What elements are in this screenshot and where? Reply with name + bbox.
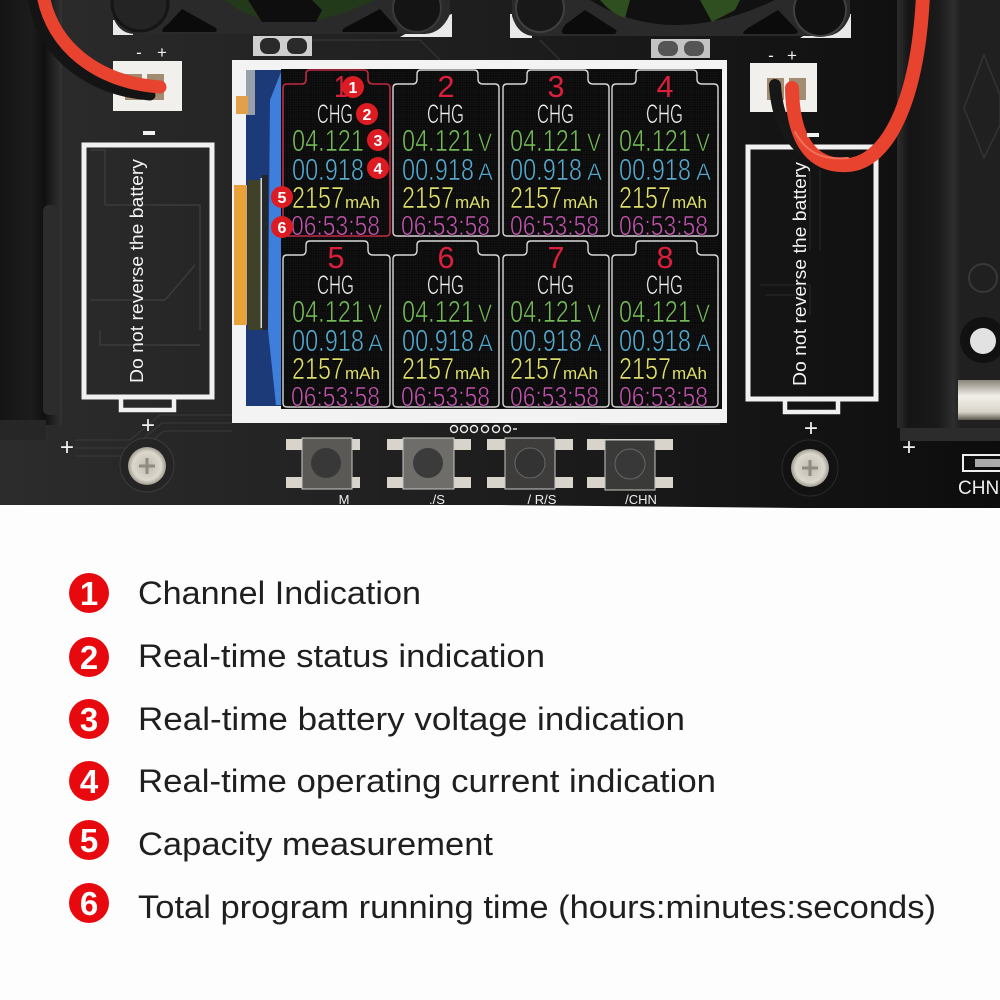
screen callout badges (271, 76, 389, 238)
channel LED label: CHN (958, 478, 999, 499)
polarity marks: + (60, 434, 74, 461)
badge 5 (271, 186, 293, 208)
polarity marks: + (787, 46, 797, 65)
legend item 1: 1 (80, 575, 98, 612)
channel 8 cell: 8 (656, 240, 674, 275)
channel 3 cell: 3 (548, 69, 564, 104)
channel 6 cell: 04.121 (402, 294, 474, 329)
channel 4 cell: CHG (646, 99, 683, 129)
channel 7 cell (503, 240, 609, 412)
cooling fan right (510, 0, 851, 38)
channel 5 cell: 06:53:58 (291, 381, 380, 412)
badge 4 (367, 157, 389, 179)
channel 7 cell: CHG (537, 270, 574, 300)
right power connector (750, 63, 817, 112)
legend item 4: 4 (80, 763, 99, 800)
channel 7 cell: mAh (563, 364, 598, 383)
channel 6 cell: 2157 (402, 351, 454, 386)
legend item 2: 2 (80, 639, 98, 676)
channel 1 cell: 00.918 (292, 152, 364, 187)
channel 4 cell: A (696, 159, 711, 186)
badge 2: 2 (363, 107, 372, 124)
button labels (339, 492, 657, 507)
channel 6 cell: 06:53:58 (401, 381, 490, 412)
display module (232, 60, 727, 423)
battery warning left: Do not reverse the battery (127, 159, 147, 383)
legend item 2: Real-time status indication (138, 638, 545, 674)
channel 4 cell (612, 69, 718, 241)
channel 1 cell: 2157 (292, 180, 344, 215)
legend item 5: Capacity measurement (138, 826, 493, 862)
channel 5 cell (283, 240, 390, 412)
channel 6 cell: CHG (427, 270, 464, 300)
channel 7 cell: A (587, 330, 602, 357)
channel 5 cell: CHG (317, 270, 354, 300)
channel 5 cell: V (368, 300, 382, 328)
badge 2 (356, 103, 378, 125)
mounting screw right (782, 440, 838, 496)
channel 1 cell: 04.121 (292, 123, 364, 158)
badge 6: 6 (278, 220, 287, 237)
legend item 1 (69, 573, 421, 613)
channel 5 cell: 2157 (292, 351, 344, 386)
legend item 4: Real-time operating current indication (138, 763, 716, 799)
channel 8 cell: CHG (646, 270, 683, 300)
channel 6 cell: mAh (455, 364, 490, 383)
channel 3 cell: A (587, 159, 602, 186)
channel 2 cell: A (478, 159, 493, 186)
badge 1: 1 (349, 80, 358, 97)
channel 7 cell: 00.918 (510, 323, 582, 358)
legend (69, 573, 936, 925)
battery warning right: Do not reverse the battery (790, 162, 810, 386)
channel 8 cell: 04.121 (619, 294, 691, 329)
channel 3 cell: CHG (537, 99, 574, 129)
button 2 (387, 438, 471, 489)
channel 7 cell: V (587, 300, 601, 328)
badge 6 (271, 216, 293, 238)
badge 3: 3 (374, 133, 383, 150)
left power connector (113, 61, 182, 111)
channel 3 cell: V (587, 129, 601, 157)
channel 7 cell: 04.121 (510, 294, 582, 329)
channel 6 cell: 6 (438, 240, 454, 275)
battery outline left (84, 145, 212, 410)
channel 6 cell: V (478, 300, 492, 328)
channel 2 cell: mAh (455, 193, 490, 212)
channel 7 cell: 06:53:58 (510, 381, 599, 412)
channel 7 cell: 7 (548, 240, 564, 275)
channel 3 cell: mAh (563, 193, 598, 212)
fan solder pads (253, 36, 710, 58)
right battery holder (897, 0, 1000, 441)
channel 1 cell: mAh (345, 193, 380, 212)
channel 8 cell: 2157 (619, 351, 671, 386)
channel 6 cell: 00.918 (402, 323, 474, 358)
legend item 6: Total program running time (hours:minutes:seconds) (138, 889, 936, 925)
channel 1 cell (283, 69, 390, 241)
legend item 1: Channel Indication (138, 575, 421, 611)
channel 8 cell: 00.918 (619, 323, 691, 358)
right power wire (775, 0, 925, 165)
channel 2 cell: 00.918 (402, 152, 474, 187)
polarity marks: - (768, 46, 774, 65)
channel 2 cell: 2157 (402, 180, 454, 215)
channel 8 cell: 06:53:58 (619, 381, 708, 412)
channel 6 cell: A (478, 330, 493, 357)
button labels: / R/S (528, 492, 557, 507)
polarity marks (60, 43, 916, 461)
flex cable and panel edge (234, 70, 282, 406)
badge 5: 5 (278, 190, 287, 207)
polarity marks: + (902, 434, 916, 461)
channel 5 cell: A (368, 330, 383, 357)
channel 2 cell: 04.121 (402, 123, 474, 158)
channel 3 cell: 2157 (510, 180, 562, 215)
channel 2 cell (393, 69, 499, 241)
button labels: M (339, 492, 349, 507)
legend item 5: 5 (80, 822, 98, 859)
channel 1 cell: 06:53:58 (291, 210, 380, 241)
channel 3 cell: 04.121 (510, 123, 582, 158)
channel 8 cell (612, 240, 718, 412)
button 4 (587, 439, 673, 490)
channel 4 cell: 04.121 (619, 123, 691, 158)
button 1 (286, 438, 360, 489)
channel 5 cell: mAh (345, 364, 380, 383)
channel 2 cell: V (478, 129, 492, 157)
screen (281, 69, 722, 409)
polarity marks: + (141, 412, 155, 439)
channel 4 cell: 4 (656, 69, 674, 104)
circuit board photo (0, 0, 1000, 520)
channel 4 cell: 2157 (619, 180, 671, 215)
channel 8 cell: A (696, 330, 711, 357)
channel 8 cell: V (696, 300, 710, 328)
channel 4 cell: 00.918 (619, 152, 691, 187)
channel 5 cell: 04.121 (292, 294, 364, 329)
channel 5 cell: 5 (328, 240, 344, 275)
channel LED label (958, 455, 1000, 499)
button 3 (487, 438, 573, 489)
cooling fan left (112, 0, 452, 37)
channel 1 cell: CHG (317, 99, 353, 129)
channel 8 cell: mAh (672, 364, 707, 383)
left battery holder (0, 0, 62, 440)
channel 1 cell: 1 (334, 69, 348, 104)
channel 7 cell: 2157 (510, 351, 562, 386)
legend item 3: 3 (80, 701, 98, 738)
channel 3 cell (503, 69, 609, 241)
mounting screw left (120, 438, 174, 492)
channel 4 cell: mAh (672, 193, 707, 212)
polarity marks: + (804, 415, 818, 442)
button labels: ./S (429, 492, 445, 507)
channel 4 cell: V (696, 129, 710, 157)
polarity marks: + (157, 43, 167, 62)
channel 6 cell (393, 240, 499, 412)
channel 4 cell: 06:53:58 (619, 210, 708, 241)
channel 3 cell: 00.918 (510, 152, 582, 187)
channel 2 cell: 06:53:58 (401, 210, 490, 241)
badge 4: 4 (374, 161, 383, 178)
channel 5 cell: 00.918 (292, 323, 364, 358)
legend item 3: Real-time battery voltage indication (138, 701, 685, 737)
battery outline right (748, 147, 876, 412)
badge 3 (367, 129, 389, 151)
button labels: /CHN (625, 492, 657, 507)
channel 3 cell: 06:53:58 (510, 210, 599, 241)
legend item 6: 6 (80, 885, 98, 922)
left power wire (33, 0, 160, 95)
channel 2 cell: CHG (427, 99, 464, 129)
channel 2 cell: 2 (438, 69, 454, 104)
polarity marks: - (136, 43, 142, 62)
badge 1 (342, 76, 364, 98)
legend item 5 (69, 820, 493, 862)
header pin holes (450, 426, 517, 432)
